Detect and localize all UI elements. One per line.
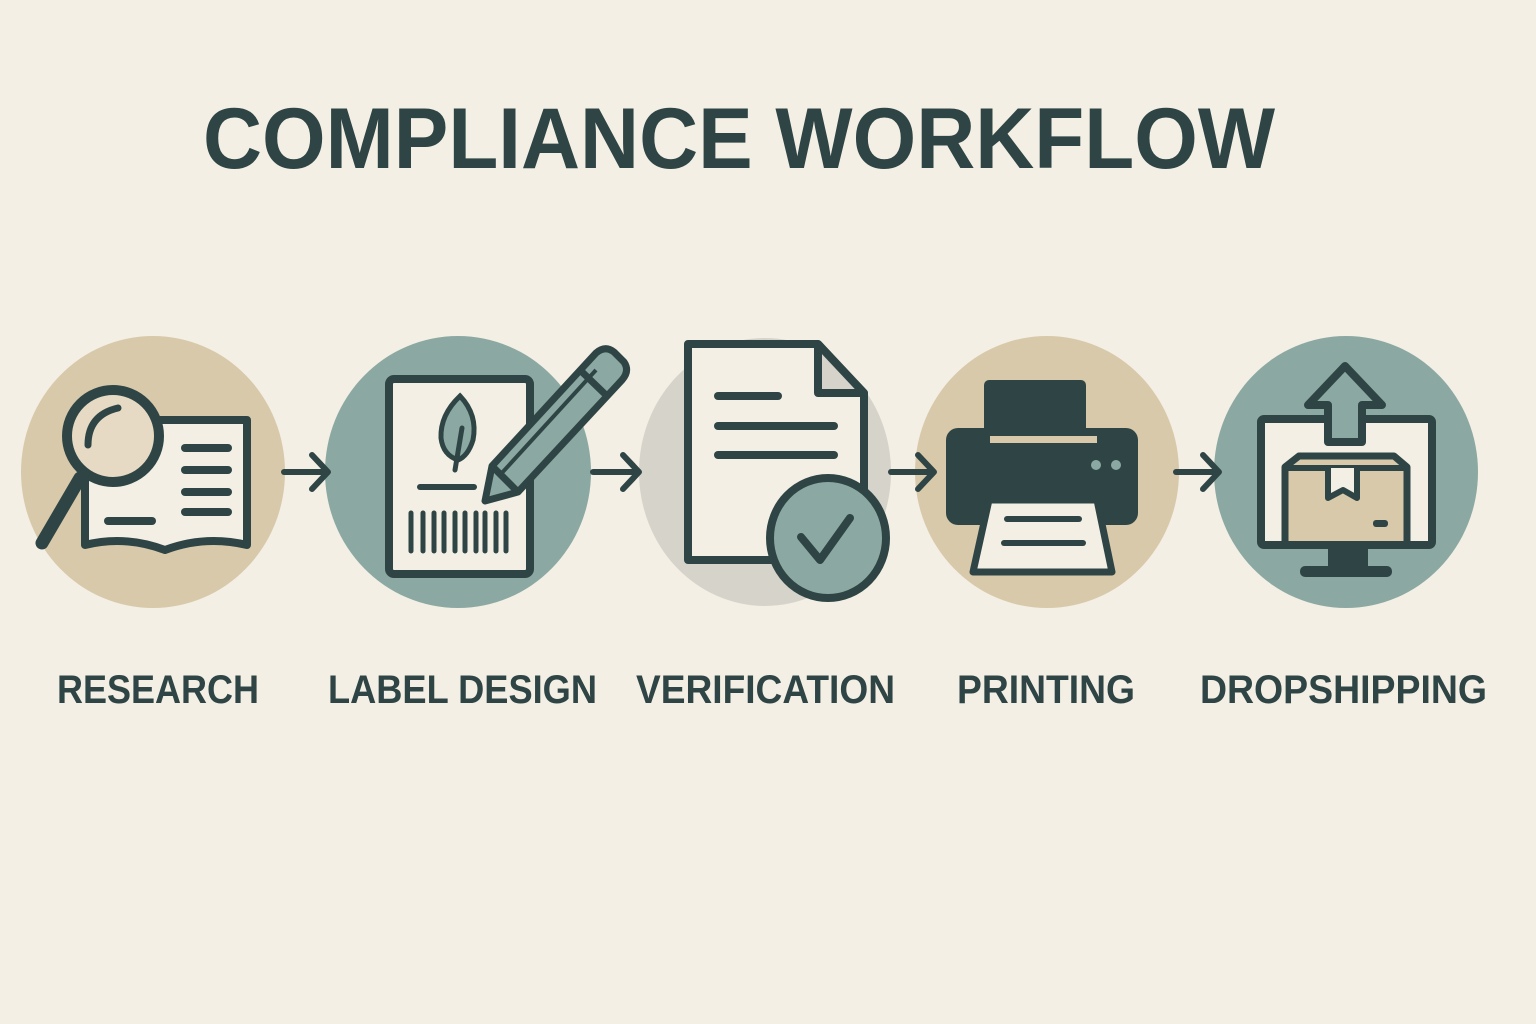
arrow 1 [284, 455, 328, 489]
labels [57, 668, 1487, 712]
label: dropshipping: DROPSHIPPING [1200, 668, 1487, 712]
icon: document [688, 344, 864, 560]
circle: research background [21, 336, 285, 608]
step: verification [639, 338, 891, 606]
label: research: RESEARCH [57, 668, 259, 712]
icon: magnifier [42, 390, 159, 543]
label: verification: VERIFICATION [636, 668, 895, 712]
circle: dropshipping background [1214, 336, 1478, 608]
step: printing [915, 336, 1179, 608]
title: COMPLIANCE WORKFLOW [203, 91, 1276, 187]
label: printing: PRINTING [957, 668, 1135, 712]
label: label design: LABEL DESIGN [328, 668, 597, 712]
circle: printing background [915, 336, 1179, 608]
circle: verification background [639, 338, 891, 606]
circle: label design background [325, 336, 591, 608]
icon: check badge [770, 478, 886, 598]
icon: monitor with box [1261, 419, 1432, 577]
step: label design [325, 336, 627, 608]
icon: pencil [485, 349, 627, 501]
step: dropshipping [1214, 336, 1478, 608]
arrow 2 [593, 455, 639, 489]
step: research [21, 336, 285, 608]
arrow 4 [1176, 455, 1219, 489]
icon: label document [389, 379, 530, 574]
icon: printer [946, 380, 1138, 572]
icon: up arrow [1308, 366, 1382, 442]
icon: open book [85, 420, 247, 550]
arrow 3 [891, 455, 934, 489]
